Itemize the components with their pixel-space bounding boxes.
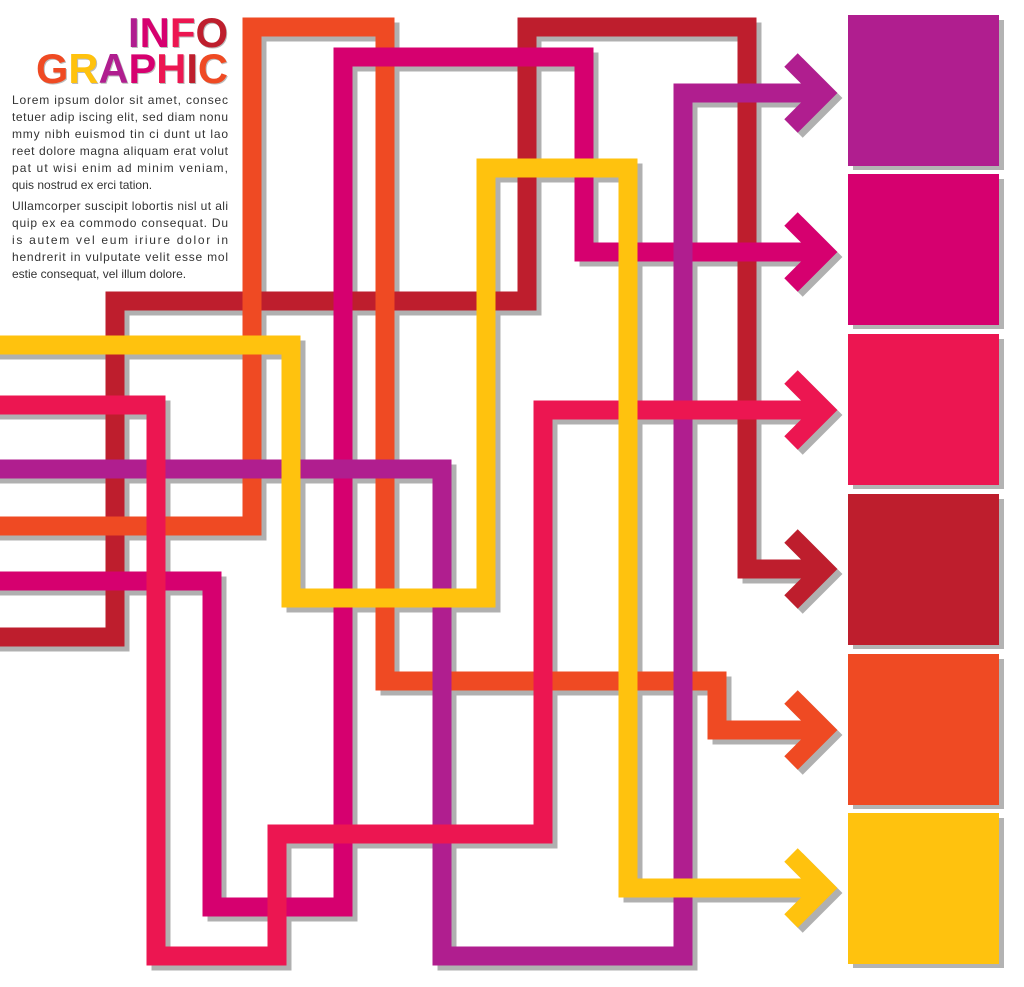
body text: mmy nibh euismod tin ci dunt ut lao xyxy=(12,127,228,141)
body text xyxy=(12,93,229,281)
line: purple xyxy=(0,60,824,956)
body text: reet dolore magna aliquam erat volut xyxy=(12,144,229,158)
line: dark red xyxy=(0,27,824,637)
body text: pat ut wisi enim ad minim veniam, xyxy=(12,161,228,175)
line: pink xyxy=(0,377,824,956)
title: INFO xyxy=(129,10,229,57)
body text: tetuer adip iscing elit, sed diam nonu xyxy=(12,110,228,124)
body text: estie consequat, vel illum dolore. xyxy=(12,267,186,281)
title: GRAPHIC xyxy=(36,45,228,92)
body text: is autem vel eum iriure dolor in xyxy=(12,233,228,247)
line: magenta xyxy=(0,57,824,907)
body text: quis nostrud ex erci tation. xyxy=(12,178,152,192)
body text: Ullamcorper suscipit lobortis nisl ut ali xyxy=(12,199,228,213)
line: yellow xyxy=(0,168,824,921)
title xyxy=(36,9,229,93)
title: GRAPHIC xyxy=(37,46,229,93)
flow lines shadows xyxy=(0,32,829,961)
body text: hendrerit in vulputate velit esse mol xyxy=(12,250,228,264)
body text: quip ex ea commodo consequat. Du xyxy=(12,216,228,230)
body text: Lorem ipsum dolor sit amet, consec xyxy=(12,93,228,107)
title: INFO xyxy=(128,9,228,56)
boxes xyxy=(848,15,1004,968)
line: orange xyxy=(0,27,824,763)
